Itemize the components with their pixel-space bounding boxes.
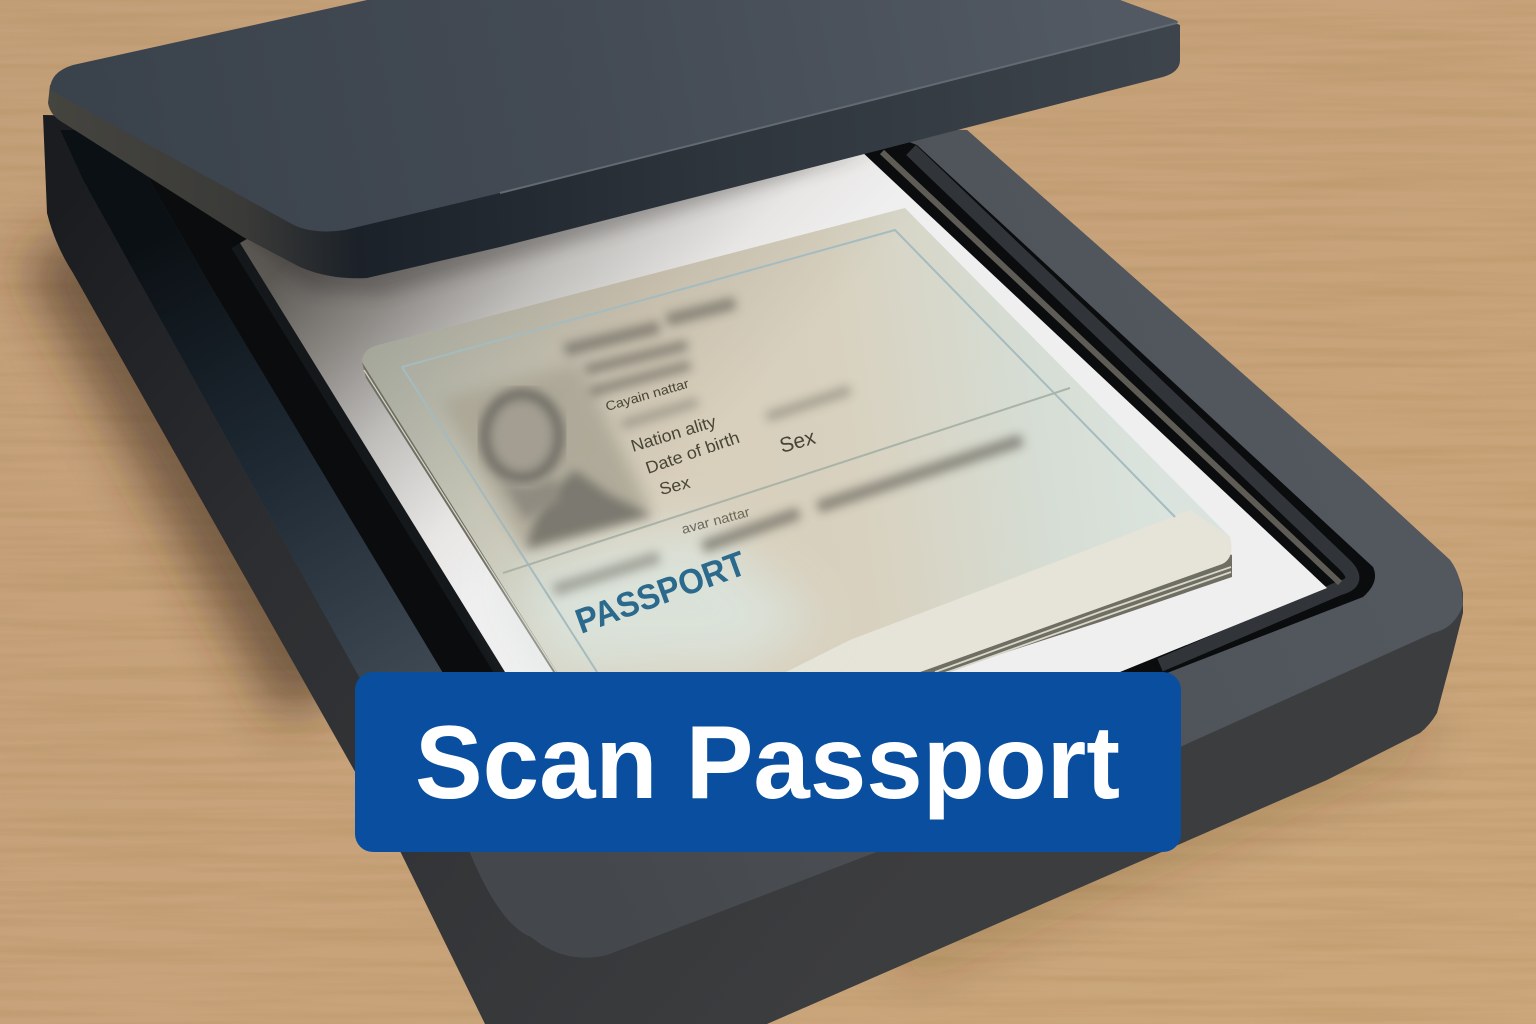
- passport lower left tint: [503, 520, 820, 672]
- passport field text: [604, 376, 818, 537]
- passport heading: PASSPORT: [570, 544, 751, 642]
- lid shadow on paper: [240, 150, 880, 295]
- passport page stack: [362, 362, 1232, 672]
- scanner lid: [48, 0, 1180, 278]
- passport: [362, 208, 1232, 672]
- paper sheet under glass: [240, 150, 1327, 672]
- lid crease highlight: [500, 23, 1177, 193]
- base left slate frame: [60, 130, 500, 742]
- base top frame: [60, 130, 1463, 958]
- lid top surface: [50, 0, 1178, 231]
- lid front edge: [48, 0, 1180, 278]
- passport field text: avar nattar: [680, 504, 752, 537]
- passport shadow from lid: [362, 208, 1231, 672]
- passport field text: Date of birth: [643, 428, 742, 478]
- passport field text: Cayain nattar: [604, 376, 691, 414]
- blurred data lines: [554, 303, 1022, 590]
- scanner shadow on desk: [60, 240, 1420, 960]
- passport field text: Sex: [777, 426, 818, 458]
- passport bottom strip: [786, 510, 1231, 672]
- scanner window black band: [120, 120, 1375, 690]
- blurred portrait photo: [440, 362, 652, 550]
- passport printed frame lines: [402, 230, 1175, 672]
- passport cover page: [362, 208, 1231, 672]
- passport field text: Nation ality: [629, 412, 719, 456]
- passport field text: Sex: [657, 473, 693, 499]
- window inner bands: [240, 150, 1352, 672]
- label: Scan Passport: Scan Passport: [415, 705, 1120, 821]
- label: Scan Passport: [355, 672, 1181, 852]
